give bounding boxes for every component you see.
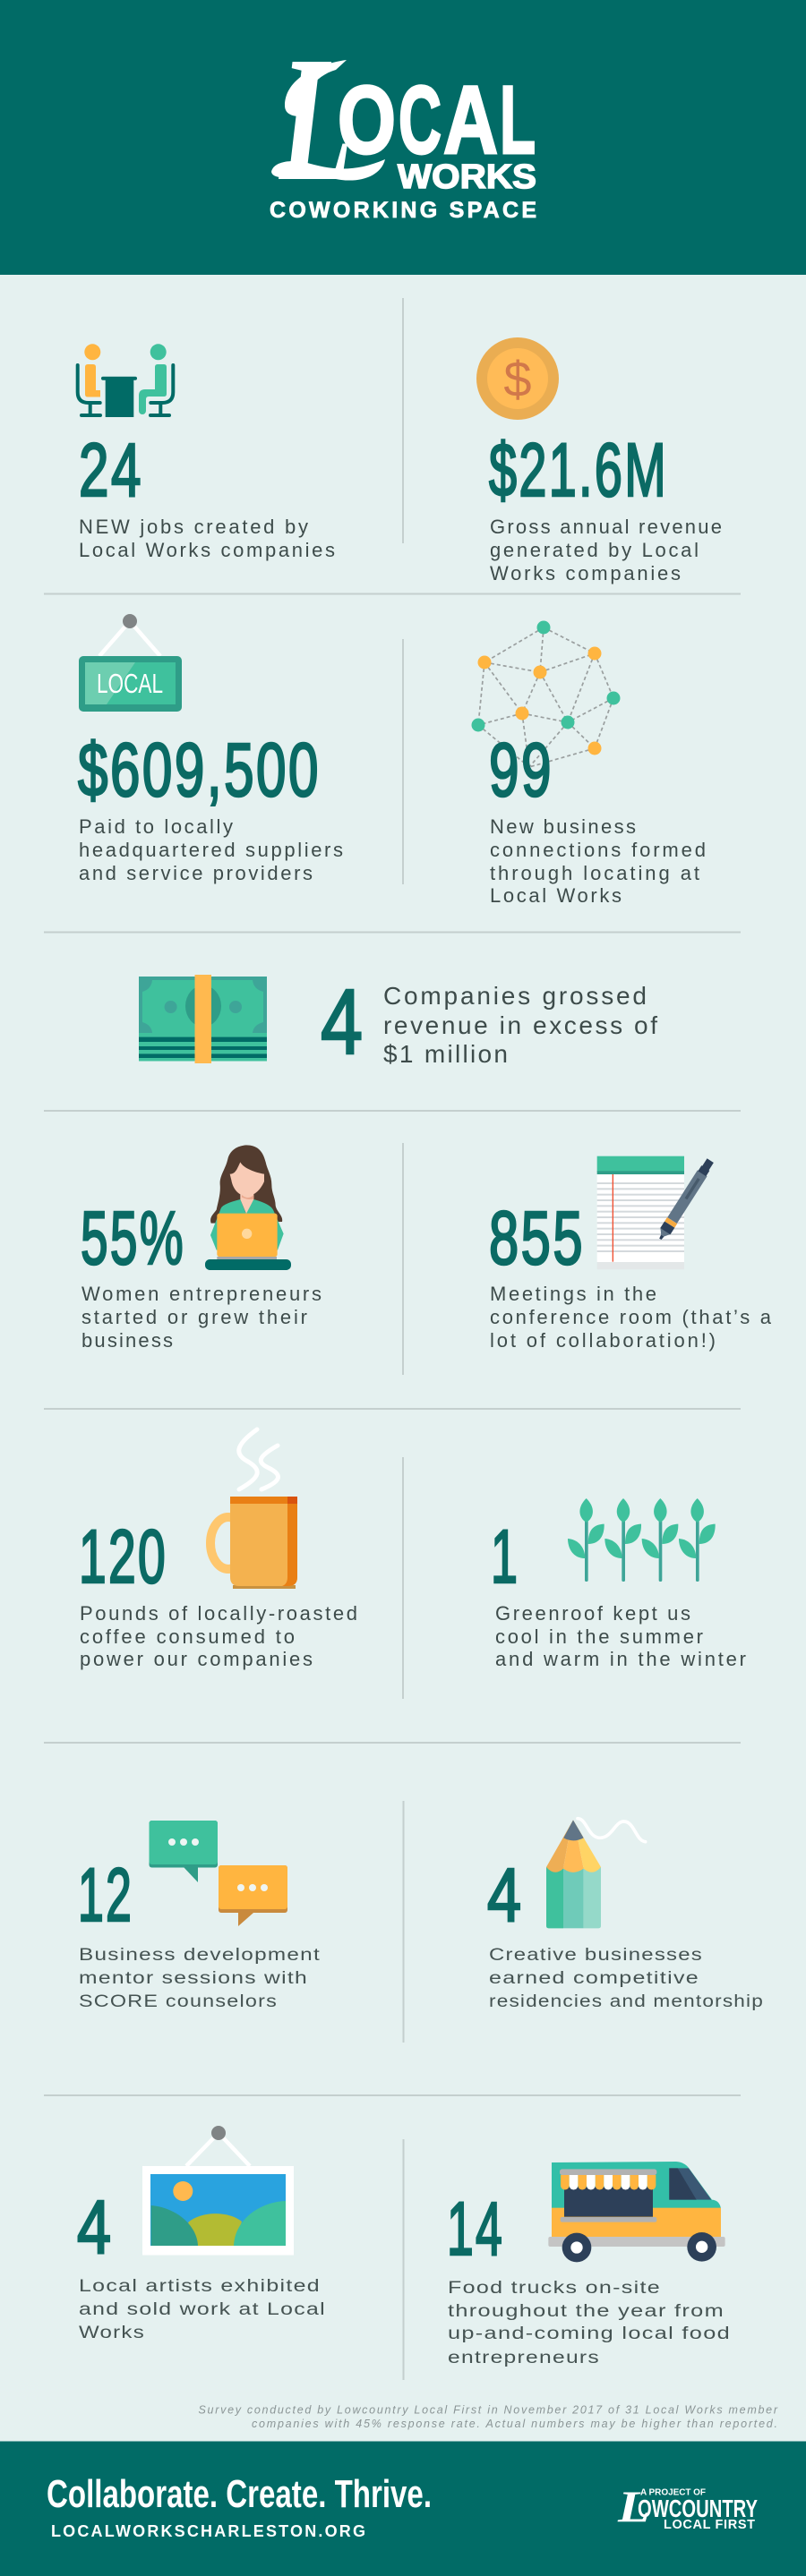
caption: New business: [490, 815, 636, 838]
stat: 855 meetings: [489, 1156, 772, 1352]
caption: [490, 815, 706, 907]
logo: OCAL: A: [443, 65, 498, 174]
caption: [448, 2279, 731, 2367]
caption: Business development: [79, 1946, 321, 1965]
caption: Pounds of locally-roasted: [80, 1602, 357, 1625]
number: 55%: [81, 1196, 185, 1280]
caption: [495, 1602, 746, 1670]
footer band: [0, 2442, 806, 2576]
caption: headquartered suppliers: [79, 839, 343, 861]
icon: pencil with squiggle: [546, 1819, 646, 1928]
icon: network of dots: [471, 621, 620, 767]
number: 99: [489, 728, 553, 812]
caption: lot of collaboration!): [490, 1329, 716, 1352]
caption: started or grew their: [81, 1306, 307, 1328]
stat: 1 greenroof: [491, 1498, 746, 1670]
stat: 12 mentor sessions: [78, 1821, 321, 2011]
number: 4: [77, 2185, 111, 2269]
caption: and service providers: [79, 862, 313, 884]
logo: OCAL: L: [500, 65, 536, 174]
icon: notepad and pen: [597, 1156, 716, 1269]
logo: OCAL: [338, 65, 536, 174]
caption: [79, 1946, 321, 2011]
stat: 55% women entrepreneurs: [81, 1145, 322, 1352]
icon: food truck: [548, 2162, 725, 2262]
logo: script L: L: [279, 21, 353, 218]
caption: revenue in excess of: [383, 1011, 657, 1039]
number: 14: [447, 2187, 504, 2271]
icon: steaming mug: [210, 1429, 297, 1589]
caption: [79, 516, 335, 561]
caption: [79, 2277, 326, 2342]
survey footnote: [199, 2404, 778, 2430]
caption: connections formed: [490, 839, 706, 861]
survey footnote: Survey conducted by Lowcountry Local First in November 2017 of 31 Local Works member: [199, 2404, 778, 2417]
stat: 24 new jobs: [78, 344, 335, 561]
stat: 4 companies over $1 million: [139, 970, 657, 1073]
website: LOCALWORKSCHARLESTON.ORG: [51, 2522, 365, 2540]
icon: stack of money: [139, 975, 267, 1063]
caption: and sold work at Local: [79, 2300, 326, 2319]
caption: SCORE counselors: [79, 1992, 278, 2011]
caption: Gross annual revenue: [490, 516, 722, 538]
caption: Local Works companies: [79, 539, 335, 561]
caption: conference room (that’s a: [490, 1306, 772, 1328]
survey footnote: companies with 45% response rate. Actual numbers may be higher than reported.: [252, 2418, 777, 2430]
caption: residencies and mentorship: [489, 1992, 764, 2011]
caption: [383, 982, 657, 1068]
icon: hanging LOCAL sign: [79, 614, 182, 712]
caption: cool in the summer: [495, 1625, 703, 1648]
icon: two people at a desk: [78, 344, 173, 417]
stat: 14 food trucks: [447, 2162, 731, 2367]
caption: Food trucks on-site: [448, 2279, 661, 2298]
caption: coffee consumed to: [80, 1625, 295, 1648]
caption: up-and-coming local food: [448, 2324, 731, 2343]
logo: OCAL: O: [338, 65, 396, 174]
caption: business: [81, 1329, 173, 1352]
caption: Local Works: [490, 884, 622, 907]
stat: 120 pounds of coffee: [79, 1429, 357, 1670]
icon: speech bubbles: [149, 1821, 287, 1926]
icon: row of plants: [568, 1498, 716, 1582]
caption: Greenroof kept us: [495, 1602, 690, 1625]
stat: 99 connections: [489, 728, 706, 907]
caption: and warm in the winter: [495, 1648, 746, 1670]
caption: generated by Local: [490, 539, 699, 561]
stat: $609,500 paid: [78, 614, 620, 884]
caption: Creative businesses: [489, 1946, 703, 1965]
caption: throughout the year from: [448, 2302, 725, 2321]
header band with logo: [0, 0, 806, 275]
number: 24: [79, 428, 143, 512]
caption: Works: [79, 2324, 145, 2342]
number: $21.6M: [489, 428, 668, 512]
number: 12: [78, 1853, 133, 1937]
caption: [490, 516, 722, 584]
stat: 4 creative businesses: [487, 1819, 764, 2011]
icon: coin: $: [503, 351, 532, 407]
footer logo: [617, 2481, 758, 2532]
caption: [79, 815, 343, 884]
caption: through locating at: [490, 862, 699, 884]
icon: coin: [476, 337, 559, 420]
stat: 4 local artists: [77, 2126, 326, 2342]
caption: $1 million: [383, 1040, 508, 1068]
icon: framed landscape: [142, 2126, 294, 2256]
number: 855: [489, 1196, 585, 1280]
logo: WORKS: WORKS: [398, 158, 536, 196]
caption: earned competitive: [489, 1969, 699, 1988]
logo subtitle: COWORKING SPACE: [270, 198, 536, 223]
number: 1: [491, 1514, 518, 1599]
icon: woman with laptop: [205, 1145, 291, 1270]
caption: Women entrepreneurs: [81, 1283, 322, 1305]
footer logo: OWCOUNTRY: [638, 2495, 758, 2522]
caption: [81, 1283, 322, 1352]
number: $609,500: [78, 728, 321, 812]
footer logo: LOCAL FIRST: [664, 2518, 755, 2532]
footer logo: L: [617, 2481, 650, 2531]
tagline: Collaborate. Create. Thrive.: [47, 2472, 432, 2516]
caption: power our companies: [80, 1648, 313, 1670]
caption: mentor sessions with: [79, 1969, 308, 1988]
number: 120: [79, 1514, 167, 1599]
number: 4: [487, 1853, 521, 1937]
caption: NEW jobs created by: [79, 516, 308, 538]
logo: OCAL: C: [399, 65, 442, 174]
caption: Paid to locally: [79, 815, 233, 838]
caption: entrepreneurs: [448, 2349, 600, 2367]
stat: $21.6M revenue: [476, 337, 722, 584]
caption: Meetings in the: [490, 1283, 656, 1305]
caption: Works companies: [490, 562, 681, 584]
caption: Local artists exhibited: [79, 2277, 321, 2296]
caption: [489, 1946, 764, 2011]
caption: Companies grossed: [383, 982, 647, 1010]
footer logo: A PROJECT OF: [640, 2488, 706, 2497]
caption: [80, 1602, 357, 1670]
icon: hanging LOCAL sign: LOCAL: [97, 668, 163, 699]
caption: [490, 1283, 772, 1352]
number: 4: [321, 970, 363, 1073]
